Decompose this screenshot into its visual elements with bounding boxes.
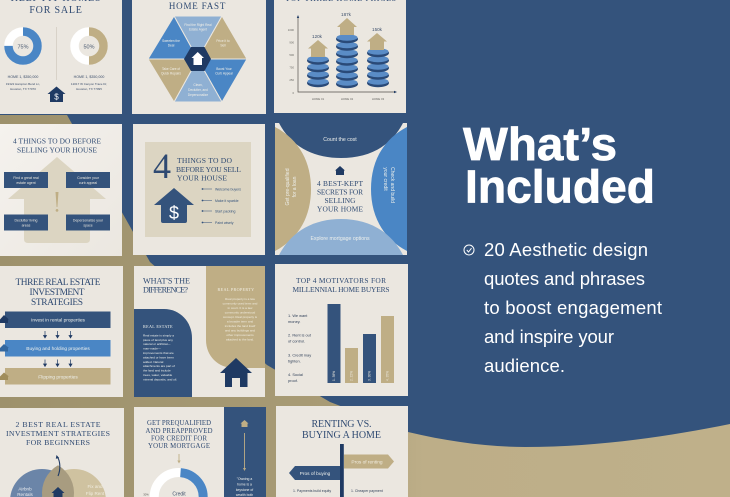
- shape: top navy: [279, 123, 403, 158]
- text: real estate: mineral deposits, and oil.: [143, 378, 177, 382]
- text: real estate: Real estate is simply a: [143, 334, 174, 338]
- chart: venn diagram: Flip Rent: [86, 491, 105, 496]
- text: real property: includes the land itself: [225, 324, 255, 328]
- text: description: and inspire your: [484, 326, 614, 347]
- heading: 2 best strategies: 2 BEST REAL ESTATE: [16, 420, 101, 429]
- shape: bottom light blue: [279, 219, 403, 255]
- text: count the cost: Count the cost: [323, 137, 357, 143]
- text: hexagon labels: Quick Repairs: [161, 72, 181, 76]
- list: four boxes: Find a great real: [13, 176, 39, 180]
- list: motivators: proof.: [288, 378, 298, 383]
- text: hexagon labels: Take Care of: [162, 67, 180, 71]
- text: check and build: your credit: [382, 167, 388, 191]
- icon: navy house: [220, 358, 252, 387]
- background: tan wave: [0, 115, 730, 497]
- panel: three strategies: [0, 266, 123, 397]
- heading: things to do: [176, 156, 241, 182]
- shape: navy sidebar: [224, 407, 266, 497]
- heading: three strategies: [16, 278, 101, 308]
- chart: axes: HOME 01: [312, 97, 325, 101]
- post: [340, 444, 344, 497]
- panel: 4 things to do before you sell: [133, 124, 265, 255]
- chart: axes: HOME 03: [372, 97, 385, 101]
- chart: venn diagram: Airbnb: [18, 486, 32, 492]
- text: hexagon labels: Sell: [220, 44, 226, 48]
- heading: motivators: MILLENNIAL HOME BUYERS: [292, 285, 390, 294]
- text: buying pro: 1. Payments build equity: [293, 489, 331, 493]
- heading: motivators: TOP 4 MOTIVATORS FOR: [296, 276, 386, 285]
- text: value labels: 187k: [341, 12, 352, 17]
- text: hexagon labels: Sweeten the: [162, 39, 180, 43]
- text: description: [484, 239, 662, 376]
- list: motivators: money.: [288, 319, 300, 324]
- chart: donut 75%: 75%: [17, 44, 29, 50]
- text: real estate: piece of land plus any: [143, 338, 173, 342]
- panel: keep fit homes for sale: [0, 0, 122, 114]
- heading: preapproved: FOR CREDIT FOR: [151, 436, 207, 442]
- text: get pre-qualified: for a loan: [292, 176, 298, 197]
- heading: secrets: YOUR HOME: [317, 204, 363, 214]
- heading: things to do: YOUR HOUSE: [177, 174, 227, 182]
- icon: dollar house: $: [54, 92, 59, 102]
- text: hexagon labels: Estate Agent: [189, 28, 207, 32]
- chart: axes: HOME 02: [341, 97, 354, 101]
- text: real property: in court. It is a law: [228, 306, 253, 310]
- text: real property: REAL PROPERTY: [218, 287, 254, 292]
- text: home 2 details: HOME 1, $350,000: [74, 75, 104, 79]
- heading: 4 things: SELLING YOUR HOUSE: [17, 146, 97, 154]
- heading: renting vs buying: RENTING VS.: [312, 419, 372, 430]
- text: quote: home is a: [237, 482, 252, 486]
- text: hexagon labels: Boost Your: [216, 67, 233, 71]
- panel: get preapproved: [134, 407, 266, 497]
- chart: bars: [328, 304, 394, 383]
- list: four boxes: Consider your: [77, 176, 100, 180]
- shape: tan panel: [206, 266, 265, 368]
- list: motivators: of control.: [288, 338, 305, 344]
- list: tips: Make it sparkle: [215, 199, 239, 203]
- icon: exclamation mark: [56, 192, 58, 212]
- text: real estate: man-made—: [143, 346, 162, 350]
- text: real estate: attached or have been: [143, 356, 174, 360]
- text: value labels: 150k: [372, 27, 383, 32]
- icon: sidebar house: [240, 420, 248, 427]
- chart: bars: 2. 22%: [350, 371, 354, 381]
- text: hexagon labels: Curb Appeal: [215, 72, 233, 76]
- text: real estate: natural or artificial—: [143, 342, 171, 346]
- bar: flipping: Flipping properties: [38, 374, 78, 380]
- arrow: sidebar line: [243, 433, 246, 471]
- chart: venn diagram: Rentals: [17, 492, 33, 497]
- list: four boxes: curb appeal: [79, 181, 97, 185]
- chart: coin stack 2: [336, 34, 358, 88]
- icon: check circle: [464, 245, 474, 255]
- panel: 2 best strategies: [0, 408, 124, 497]
- text: real property: and any buildings and: [225, 328, 255, 332]
- list: motivators: tighten.: [288, 358, 301, 364]
- heading: three strategies: INVESTMENT: [30, 288, 85, 298]
- title: what's included: What’s: [463, 118, 617, 170]
- text: real property: other improvements: [226, 333, 254, 337]
- heading: 4 things: 4 THINGS TO DO BEFORE: [13, 136, 101, 146]
- chart: bars: 4. 35%: [386, 371, 390, 381]
- text: hexagon labels: Price it to: [216, 39, 230, 43]
- icon: large house arrow: [8, 157, 106, 243]
- list: four boxes: [4, 172, 110, 230]
- text: real property: [218, 287, 258, 342]
- list: motivators: [288, 313, 312, 383]
- chart: axes: 0: [292, 91, 294, 95]
- text: renting pro: 1. Cheaper payment: [351, 489, 383, 493]
- list: motivators: 1. We want: [288, 313, 308, 318]
- heading: what's the difference: [143, 276, 190, 294]
- heading: things to do: THINGS TO DO: [177, 156, 233, 165]
- icon: up arrows: [308, 18, 387, 57]
- text: home 1 details: [6, 75, 40, 91]
- list: four boxes: Depersonalize your: [73, 218, 104, 222]
- text: quote: keystone of: [236, 488, 253, 492]
- text: home 1 details: 19322 Hampton Bend Ln,: [6, 82, 40, 86]
- icon: center house: [184, 47, 211, 71]
- text: check and build: Check and build: [389, 167, 395, 203]
- text: real estate: [143, 324, 177, 382]
- arrow: tan down: [177, 454, 181, 464]
- text: check and build: [382, 167, 395, 203]
- shape: navy panel: [134, 309, 192, 397]
- arrows: row two: [44, 360, 72, 366]
- heading: things to do: BEFORE YOU SELL: [176, 165, 241, 174]
- text: real property: commonly understood: [225, 310, 255, 314]
- chart: axes: [288, 15, 397, 101]
- chart: coin stack 1: [307, 56, 329, 87]
- list: four boxes: Declutter living: [15, 218, 38, 222]
- heading: what's the difference: DIFFERENCE?: [143, 286, 188, 294]
- title: what's included: [463, 118, 655, 212]
- list: tips: Paint wisely: [215, 221, 234, 225]
- heading: preapproved: [146, 420, 213, 450]
- heading: home fast: HOME FAST: [169, 1, 226, 11]
- heading: secrets: SELLING: [324, 196, 356, 205]
- panel: top 4 motivators: [275, 264, 408, 396]
- icon: venn house: [52, 487, 64, 497]
- text: real estate: trees, water, valuable: [143, 373, 173, 377]
- list: motivators: 3. Credit may: [288, 352, 311, 358]
- text: home 1 details: Houston, TX 77070: [10, 87, 36, 91]
- chart: axes: 250: [289, 78, 294, 82]
- heading: 4 things: [13, 136, 101, 154]
- text: real estate: the land and include: [143, 368, 171, 372]
- icon: dollar house: $: [169, 203, 179, 223]
- chart: venn diagram: Fix and: [87, 484, 103, 489]
- heading: for sale: FOR SALE: [29, 5, 83, 16]
- heading: three strategies: THREE REAL ESTATE: [16, 278, 101, 288]
- heading: what's the difference: WHAT'S THE: [143, 276, 190, 286]
- chart: axes: 1000: [288, 28, 294, 32]
- text: description: quotes and phrases: [484, 268, 645, 289]
- text: hexagon labels: Clean,: [193, 83, 203, 87]
- chart: axes: 900: [289, 40, 294, 44]
- text: quote: [236, 477, 253, 497]
- text: get pre-qualified: [285, 168, 298, 205]
- panel: 4 things before selling: [0, 124, 122, 256]
- list: tips: Welcome buyers: [215, 188, 241, 192]
- panel: renting vs buying: [276, 406, 408, 497]
- heading: renting vs buying: BUYING A HOME: [302, 430, 381, 441]
- text: real estate: improvements that are: [143, 351, 174, 355]
- text: real property: concept. Real property is: [223, 315, 258, 319]
- list: tips: Start packing: [215, 210, 235, 214]
- list: four boxes: areas: [22, 224, 31, 228]
- text: real property: commonly used term and: [223, 302, 258, 306]
- arrow: pros of buying: Pros of buying: [300, 471, 331, 477]
- panel: hexagon home fast: [132, 0, 266, 114]
- text: home 2 details: Houston, TX 77095: [76, 87, 102, 91]
- shape: left tan: [275, 127, 311, 251]
- list: motivators: 2. Rent is out: [288, 332, 312, 338]
- text: real property: attached to the land.: [226, 338, 254, 342]
- inner tan panel: [145, 142, 251, 237]
- heading: preapproved: GET PREQUALIFIED: [147, 420, 211, 427]
- heading: renting vs buying: [302, 419, 381, 441]
- heading: for sale: [11, 0, 101, 16]
- title: what's included: Included: [465, 160, 655, 212]
- text: hexagon labels: Declutter, and: [188, 88, 208, 92]
- panel: 4 best-kept secrets: [275, 123, 407, 255]
- chart: axes: 750: [289, 66, 294, 70]
- shape: right blue: [371, 127, 407, 251]
- text: explore mortgage: Explore mortgage options: [310, 236, 370, 242]
- chart: donut credit: 30%: [143, 492, 149, 496]
- chart: bars: 1. 38%: [332, 371, 336, 381]
- heading: secrets: SECRETS FOR: [317, 188, 363, 196]
- heading: motivators: [292, 276, 390, 294]
- text: description: audience.: [484, 355, 565, 376]
- heading: 2 best strategies: FOR BEGINNERS: [26, 438, 90, 447]
- list: motivators: 4. Social: [288, 372, 303, 377]
- text: home 2 details: [71, 75, 107, 91]
- arrow: pros of renting: Pros of renting: [351, 460, 383, 466]
- text: description: 20 Aesthetic design: [484, 239, 648, 260]
- text: value labels: 120k: [312, 34, 323, 39]
- heading: big number 4: 4: [153, 146, 171, 186]
- bar: rental: Invest in rental properties: [31, 318, 86, 324]
- bar: buying and holding: Buying and holding properties: [26, 346, 90, 352]
- text: description: to boost engagement: [484, 297, 662, 318]
- list: four boxes: estate agent: [16, 181, 36, 185]
- chart: donut 50%: 50%: [83, 44, 95, 50]
- text: home 1 details: HOME 1, $350,000: [8, 75, 38, 79]
- text: hexagon labels: Find the Right Real: [184, 23, 212, 27]
- chart: bars: 3. 30%: [368, 371, 372, 381]
- text: get pre-qualified: Get pre-qualified: [285, 168, 291, 205]
- chart: donut credit: [143, 472, 203, 497]
- text: value labels: [312, 12, 383, 39]
- text: real estate: REAL ESTATE: [143, 324, 173, 329]
- panel: coin chart: [274, 0, 406, 113]
- heading: secrets: [317, 179, 363, 214]
- icon: small house: [335, 166, 345, 175]
- text: hexagon labels: Depersonalize: [188, 93, 208, 97]
- heading: secrets: 4 BEST-KEPT: [317, 179, 363, 188]
- panel: what's the difference: [134, 266, 265, 397]
- text: hexagon labels: [161, 23, 233, 97]
- text: real property: Real property is a law: [225, 297, 256, 301]
- chart: venn diagram: [10, 465, 106, 497]
- chart: hexagon segments: [148, 16, 247, 102]
- chart: axes: 500: [289, 53, 294, 57]
- text: real estate: added. Natural: [143, 360, 164, 364]
- heading: three strategies: STRATEGIES: [31, 298, 83, 308]
- text: quote: "Owning a: [237, 477, 252, 481]
- text: hexagon labels: Deal: [168, 44, 175, 48]
- heading: preapproved: AND PREAPPROVED: [146, 428, 213, 435]
- text: real estate: attachments are part of: [143, 364, 175, 368]
- text: quote: wealth both: [236, 493, 253, 497]
- icon: curved arrow: [56, 455, 60, 476]
- heading: 2 best strategies: INVESTMENT STRATEGIES: [6, 429, 110, 438]
- chart: coin stack 3: [367, 48, 389, 87]
- list: four boxes: space: [83, 224, 93, 228]
- heading: 2 best strategies: [6, 420, 110, 447]
- text: home 2 details: 12017 W Canyon Trace Dr,: [71, 82, 107, 86]
- arrows: row one: [44, 331, 72, 338]
- list: tips: [202, 188, 241, 225]
- heading: preapproved: YOUR MORTGAGE: [148, 443, 210, 450]
- text: real property: a broader term and: [227, 320, 253, 324]
